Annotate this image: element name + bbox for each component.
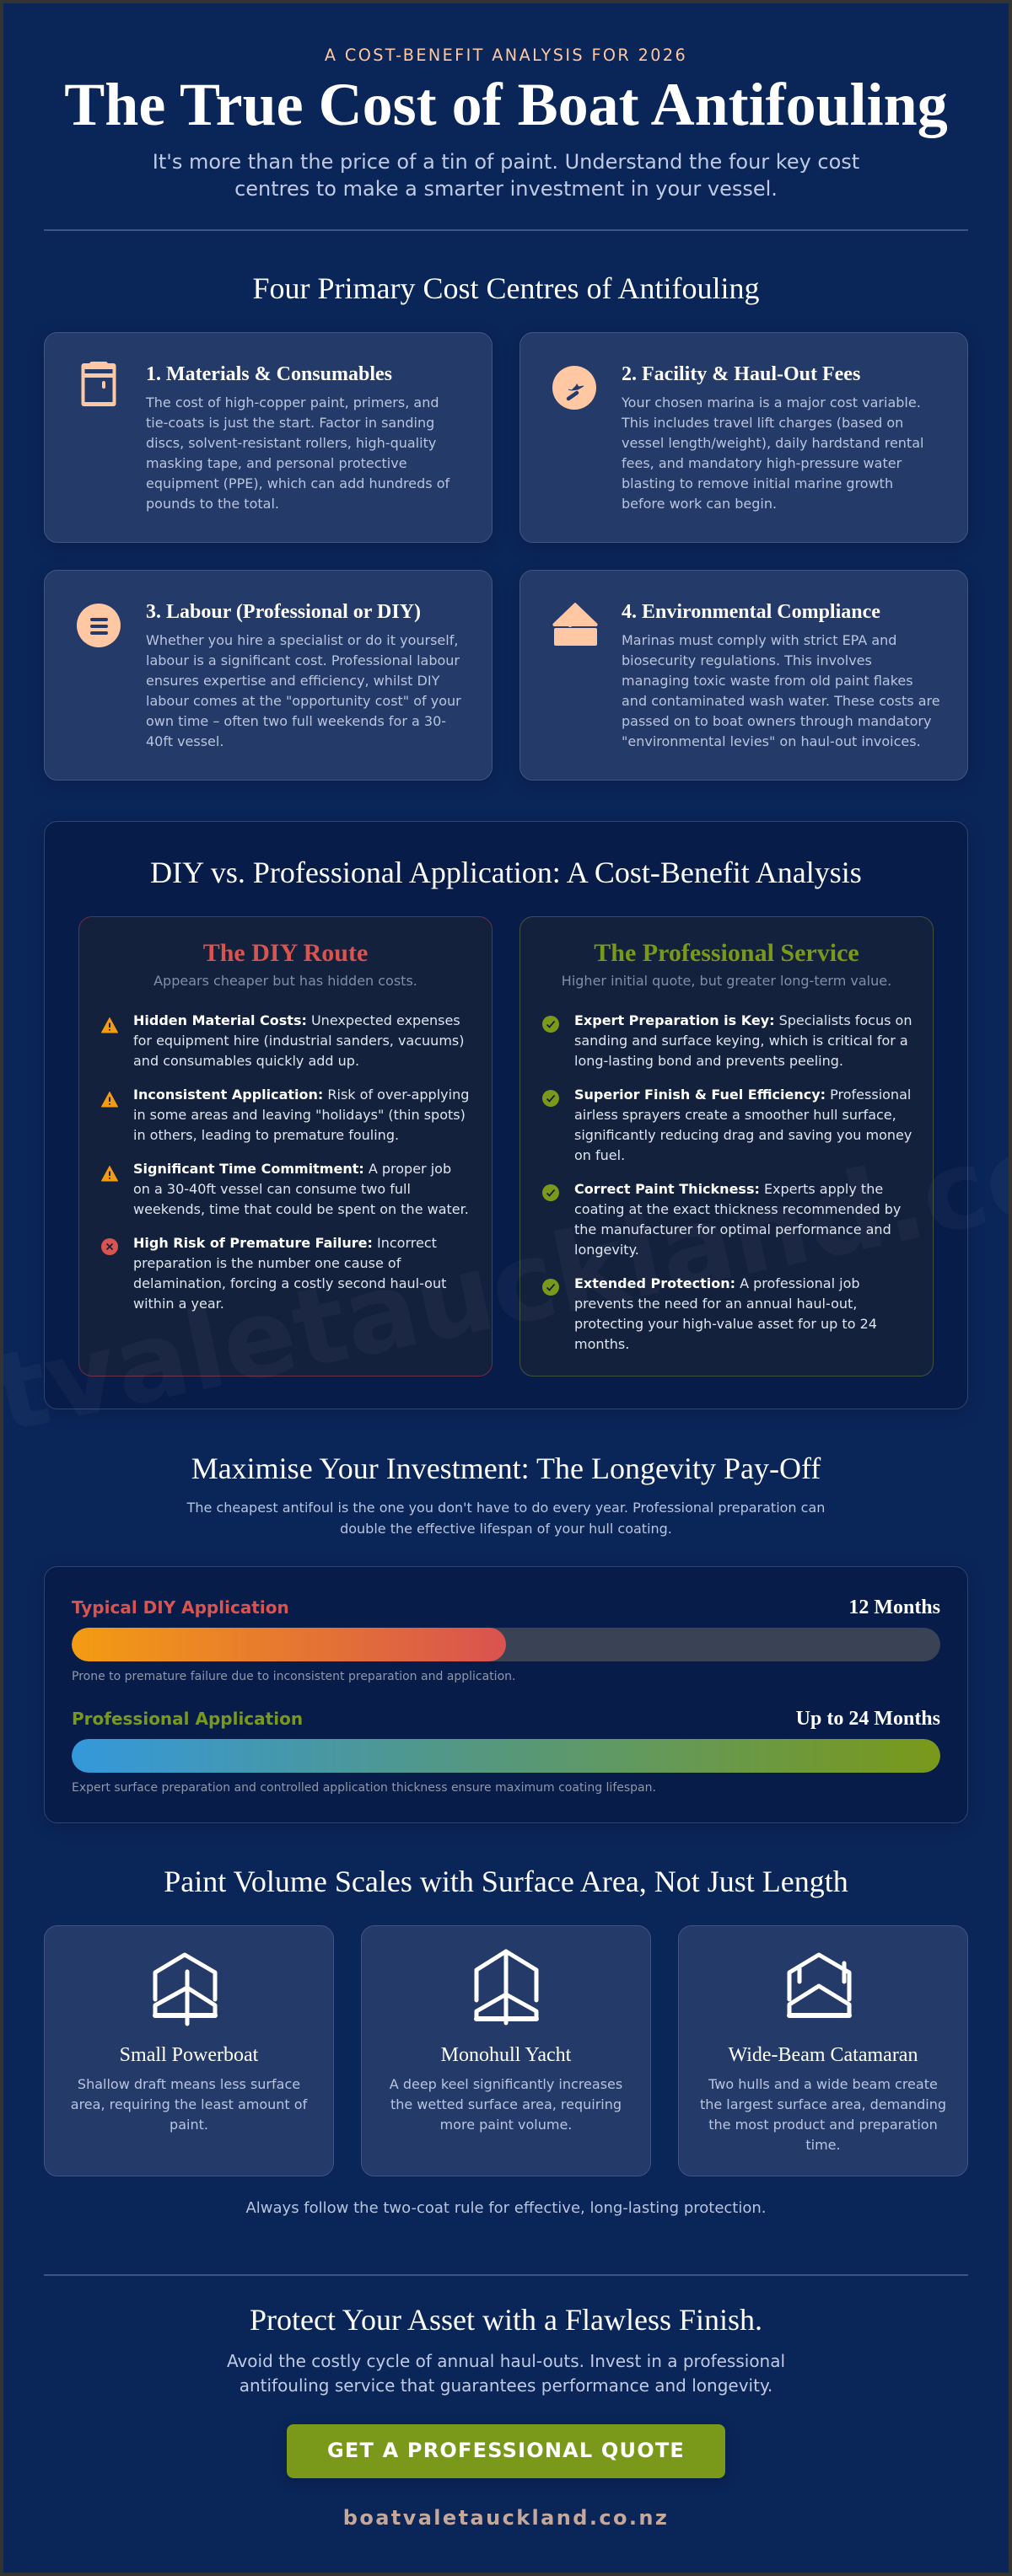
icon: yacht hull (474, 1949, 539, 2025)
description: tie-coats is just the start. Factor in sanding (146, 415, 434, 431)
note: professional: Expert surface preparation and controlled application thickness ensure maximum coating lifespan. (72, 1781, 656, 1795)
description: A deep keel significantly increases (390, 2076, 622, 2092)
longevity intro: double the effective lifespan of your hull coating. (340, 1521, 672, 1536)
item: hidden material costs: for equipment hire (industrial sanders, vacuums) (133, 1033, 464, 1049)
item: superior finish: on fuel. (574, 1147, 625, 1163)
description: blasting to remove initial marine growth (622, 475, 893, 491)
description: discs, solvent-resistant rollers, high-quality (146, 435, 436, 451)
icon: catamaran hull (787, 1952, 852, 2018)
item: inconsistent application (133, 1087, 469, 1143)
item: extended protection (574, 1275, 877, 1352)
icon: check (542, 1184, 559, 1201)
item: inconsistent application: in some areas and leaving "holidays" (thin spots) (133, 1107, 466, 1123)
item: high risk of premature failure: delamination, forcing a costly second haul-out (133, 1275, 446, 1291)
description: the largest surface area, demanding (700, 2096, 946, 2112)
boat name: Small Powerboat (120, 2044, 258, 2066)
item: expert preparation (574, 1012, 912, 1069)
item: hidden material costs (133, 1012, 464, 1069)
panel: facility and haul-out fees (519, 332, 968, 543)
description: 40ft vessel. (146, 733, 223, 749)
professional subheading: Higher initial quote, but greater long-term value. (562, 973, 891, 989)
panel: monohull yacht (361, 1925, 651, 2176)
icon: check (542, 1016, 559, 1033)
description: more paint volume. (440, 2117, 572, 2133)
two-coat note: Always follow the two-coat rule for effective, long-lasting protection. (245, 2199, 767, 2217)
description (390, 2076, 622, 2133)
description: own time – often two full weekends for a 30- (146, 713, 446, 729)
description: Shallow draft means less surface (78, 2076, 300, 2092)
subtitle: It's more than the price of a tin of paint. Understand the four key cost (153, 150, 859, 174)
description: equipment (PPE), which can add hundreds of (146, 475, 449, 491)
item: significant time commitment (133, 1161, 469, 1217)
icon: check (542, 1279, 559, 1296)
panel: wide-beam catamaran (678, 1925, 968, 2176)
item: superior finish: significantly reducing drag and saving you money (574, 1127, 912, 1143)
description (700, 2076, 946, 2153)
button: get a quote (287, 2424, 725, 2478)
heading: 4. Environmental Compliance (622, 601, 880, 623)
bar: DIY 50 percent (72, 1628, 940, 1661)
boat name: Monohull Yacht (441, 2044, 571, 2066)
icon: warning (101, 1166, 118, 1182)
icon: warning (101, 1017, 118, 1033)
description (145, 394, 450, 512)
subtitle: centres to make a smarter investment in your vessel. (234, 177, 778, 201)
heading: 3. Labour (Professional or DIY) (146, 601, 421, 623)
description (146, 632, 461, 749)
call to action text: antifouling service that guarantees performance and longevity. (240, 2375, 772, 2396)
description: and contaminated wash water. These costs are (622, 693, 940, 709)
button: get a quote: GET A PROFESSIONAL QUOTE (327, 2439, 685, 2462)
heading: 2. Facility & Haul-Out Fees (622, 363, 860, 385)
item: expert preparation: sanding and surface keying, which is critical for a (574, 1033, 908, 1049)
panel: materials and consumables (44, 332, 493, 543)
label: DIY: Typical DIY Application (72, 1597, 289, 1618)
call to action text: Avoid the costly cycle of annual haul-outs. Invest in a professional (227, 2351, 785, 2371)
description: This includes travel lift charges (based on (622, 415, 903, 431)
heading: longevity: Maximise Your Investment: The Longevity Pay-Off (191, 1452, 821, 1485)
item: correct paint thickness: the manufacturer for optimal performance and (574, 1221, 891, 1237)
item: significant time commitment: Significant Time Commitment: A proper job (133, 1161, 451, 1177)
item: high risk of premature failure: within a year. (133, 1296, 224, 1312)
item: high risk of premature failure: High Risk of Premature Failure: Incorrect (133, 1235, 437, 1251)
heading: call to action: Protect Your Asset with a Flawless Finish. (250, 2303, 762, 2337)
column: professional service (519, 916, 934, 1377)
description: labour is a significant cost. Professional labour (146, 652, 460, 668)
item: correct paint thickness: Correct Paint Thickness: Experts apply the (574, 1181, 883, 1197)
panel: longevity bar chart (44, 1566, 968, 1823)
icon: labour list (77, 604, 121, 647)
description: The cost of high-copper paint, primers, and (146, 394, 439, 411)
description: Marinas must comply with strict EPA and (622, 632, 896, 648)
description: before work can begin. (622, 496, 777, 512)
description: vessel length/weight), daily hardstand rental (622, 435, 923, 451)
item: correct paint thickness: longevity. (574, 1242, 639, 1258)
website address: boatvaletauckland.co.nz (343, 2506, 669, 2530)
item: inconsistent application: Inconsistent Application: Risk of over-applying (133, 1087, 469, 1103)
description: "environmental levies" on haul-out invoices. (622, 733, 921, 749)
item: expert preparation: long-lasting bond and prevents peeling. (574, 1053, 843, 1069)
panel: small powerboat (44, 1925, 334, 2176)
description: masking tape, and personal protective (146, 455, 407, 471)
value: up to 24 months: Up to 24 Months (796, 1708, 940, 1730)
description: managing toxic waste from old paint flakes (622, 673, 913, 689)
description: pounds to the total. (146, 496, 279, 512)
heading: paint volume: Paint Volume Scales with Surface Area, Not Just Length (164, 1865, 848, 1898)
item: hidden material costs: Hidden Material Costs: Unexpected expenses (133, 1012, 460, 1028)
DIY heading: The DIY Route (203, 939, 368, 967)
icon: warning (101, 1092, 118, 1108)
column: DIY route (78, 916, 493, 1377)
longevity intro: The cheapest antifoul is the one you don't have to do every year. Professional preparation can (187, 1500, 825, 1516)
item: extended protection: protecting your high-value asset for up to 24 (574, 1316, 877, 1332)
item: extended protection: prevents the need for an annual haul-out, (574, 1296, 857, 1312)
comparison heading: DIY vs. Professional Application: A Cost-Benefit Analysis (150, 856, 862, 889)
description: fees, and mandatory high-pressure water (622, 455, 902, 471)
panel: labour (44, 570, 493, 781)
professional heading: The Professional Service (594, 939, 859, 967)
item: significant time commitment: weekends, time that could be spent on the water. (133, 1201, 469, 1217)
icon: envelope box (552, 603, 598, 646)
icon: powerboat hull (153, 1952, 218, 2026)
description: biosecurity regulations. This involves (622, 652, 872, 668)
longevity intro (187, 1500, 825, 1536)
item: superior finish: airless sprayers create a smoother hull surface, (574, 1107, 896, 1123)
panel: DIY vs professional comparison (44, 821, 968, 1409)
description: labour comes at the "opportunity cost" of your (146, 693, 461, 709)
call to action text (227, 2351, 785, 2396)
item: expert preparation: Expert Preparation is Key: Specialists focus on (574, 1012, 912, 1028)
icon: paint tin (81, 362, 116, 406)
heading: 1. Materials & Consumables (146, 363, 392, 385)
panel: environmental compliance (519, 570, 968, 781)
description: the most product and preparation (708, 2117, 938, 2133)
bar: professional 100 percent (72, 1739, 940, 1773)
item: superior finish: Superior Finish & Fuel Efficiency: Professional (574, 1087, 911, 1103)
description: ensures expertise and efficiency, whilst DIY (146, 673, 439, 689)
DIY subheading: Appears cheaper but has hidden costs. (153, 973, 417, 989)
description: paint. (170, 2117, 208, 2133)
description (621, 394, 923, 512)
subtitle (153, 150, 859, 201)
item: extended protection: months. (574, 1336, 629, 1352)
icon: check (542, 1090, 559, 1107)
heading: four cost centres: Four Primary Cost Centres of Antifouling (253, 271, 759, 305)
description: the wetted surface area, requiring (390, 2096, 622, 2112)
description (622, 632, 940, 749)
item: high risk of premature failure: preparation is the number one cause of (133, 1255, 401, 1271)
boat name: Wide-Beam Catamaran (729, 2044, 918, 2066)
eyebrow text: A COST-BENEFIT ANALYSIS FOR 2026 (325, 46, 687, 65)
item: inconsistent application: in others, leading to premature fouling. (133, 1127, 399, 1143)
description (71, 2076, 308, 2133)
item: high risk of premature failure (133, 1235, 447, 1312)
item: correct paint thickness: coating at the exact thickness recommended by (574, 1201, 901, 1217)
description: Your chosen marina is a major cost variable. (622, 394, 921, 411)
item: extended protection: Extended Protection: A professional job (574, 1275, 860, 1291)
value: 12 months: 12 Months (848, 1597, 940, 1618)
description: Two hulls and a wide beam create (708, 2076, 938, 2092)
icon: travel lift (552, 366, 596, 410)
description: area, requiring the least amount of (71, 2096, 307, 2112)
item: superior finish (574, 1087, 912, 1163)
label: professional: Professional Application (72, 1709, 303, 1729)
icon: cross (101, 1238, 118, 1255)
description: time. (805, 2137, 841, 2153)
item: correct paint thickness (574, 1181, 901, 1258)
note: DIY: Prone to premature failure due to inconsistent preparation and application. (72, 1670, 515, 1683)
title: The True Cost of Boat Antifouling (64, 71, 948, 138)
description: Whether you hire a specialist or do it yourself, (146, 632, 458, 648)
item: significant time commitment: on a 30-40ft vessel can consume two full (133, 1181, 411, 1197)
description: passed on to boat owners through mandatory (622, 713, 931, 729)
item: hidden material costs: and consumables quickly add up. (133, 1053, 359, 1069)
